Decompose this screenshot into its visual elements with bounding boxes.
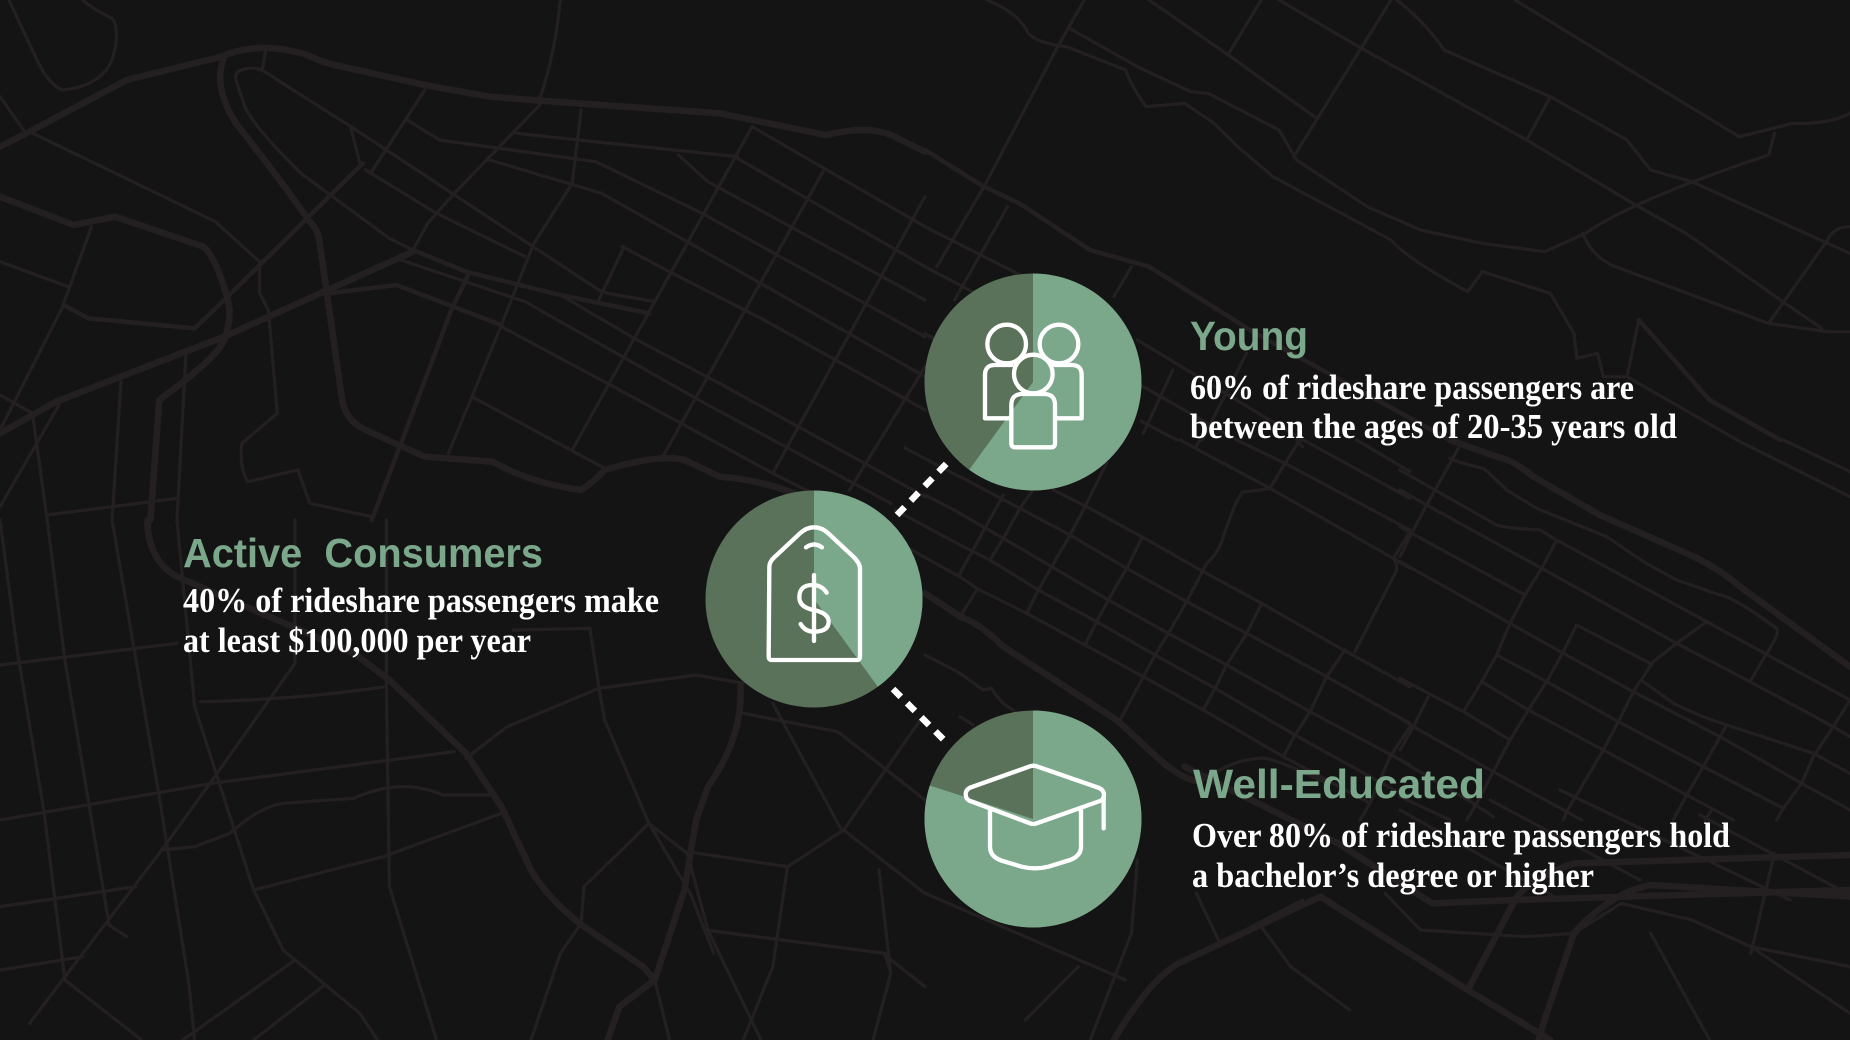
heading: young: Young (1190, 313, 1308, 359)
heading: active consumers: Active Consumers (183, 530, 543, 576)
text: well-educated description: a bachelor’s degree or higher (1192, 856, 1594, 895)
icon: graduation cap (966, 766, 1104, 868)
text: well-educated description (1192, 816, 1730, 895)
icon: price tag with dollar sign (769, 527, 860, 660)
icon: group of people (985, 325, 1082, 447)
dashed connector: active consumers to well-educated (893, 689, 946, 742)
panel: well-educated (924, 710, 1730, 928)
text: active consumers description (183, 581, 659, 660)
text: young description (1190, 368, 1677, 446)
text: well-educated description: Over 80% of rideshare passengers hold (1192, 816, 1730, 855)
panel: active consumers (183, 490, 923, 708)
heading: well-educated: Well-Educated (1193, 761, 1485, 807)
text: active consumers description: at least $100,000 per year (183, 621, 531, 660)
dashed connector: active consumers to young (897, 463, 947, 515)
text: young description: 60% of rideshare passengers are (1190, 368, 1634, 407)
pie chart: 40 percent (706, 490, 923, 708)
text: young description: between the ages of 20-35 years old (1190, 407, 1677, 446)
panel: young (924, 274, 1677, 490)
pie chart: 60 percent (924, 274, 1142, 490)
pie chart: 80 percent (924, 710, 1142, 928)
text: active consumers description: 40% of rideshare passengers make (183, 581, 659, 620)
